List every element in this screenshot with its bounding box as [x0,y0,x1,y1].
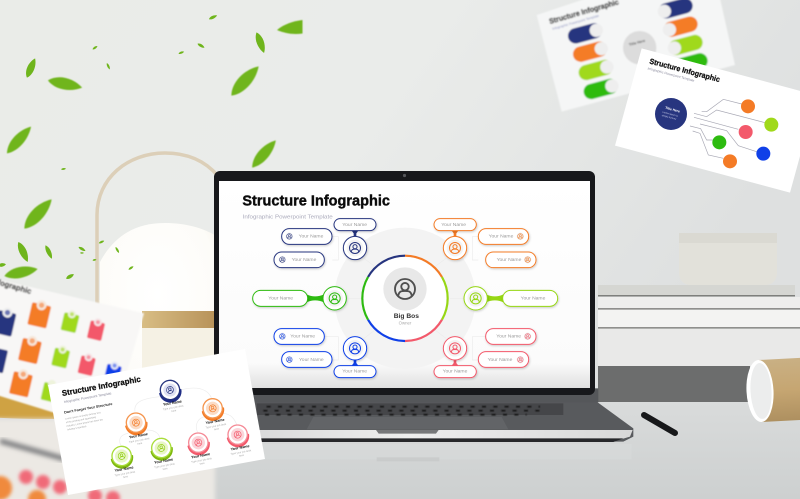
slide title: Structure Infographic [61,375,142,398]
front slide top right (network): Lorem ipsum is [662,111,679,118]
cardboard tube [745,357,800,423]
chart node orange right [200,397,228,433]
laptop [183,171,633,461]
chart node pink one: here [199,462,206,466]
network lines [690,99,765,158]
blue branch [274,329,376,378]
blue branch: Your Name [299,357,324,363]
connecting lines [120,388,237,447]
pen [644,415,675,433]
camera [403,174,406,177]
chart node orange left: here [137,442,143,446]
front slide top right (network): simply dummy [661,115,677,121]
chart node pink two [225,423,253,459]
title here circle [655,98,687,130]
chart node pink two: Your Name [230,444,250,451]
front slide left (org chart): Lorem Ipsum is simply dummy text [65,411,101,421]
subtitle: Infographic Powerpoint Template [243,214,333,220]
lime branch [464,287,558,310]
centre person [383,267,427,325]
chart node pink two: here [239,454,245,458]
pink branch: Your Name [488,357,513,363]
chart node pink two: Type your job desk [230,449,252,456]
back slide left (cards) [0,266,144,430]
chart node lime one: here [123,475,129,479]
orange branch: Your Name [441,222,466,228]
title: Structure Infographic [242,194,390,210]
centre ring [362,256,448,341]
chart node orange left: Type your job desk [129,437,151,444]
pink branch: Your Name [443,369,468,375]
blurred foreground object bottom left [0,419,215,499]
navy branch: Your Name [292,257,317,263]
front slide left (org chart): of the printing and typesetting [66,416,97,424]
chart node pink one: Your Name [191,452,210,459]
owner label: Owner [399,320,412,325]
chart node lime one: Your Name [114,465,134,473]
navy branch: Your Name [342,222,367,228]
coloured nodes [741,99,755,113]
chart node orange right: Your Name [205,418,225,425]
front slide top right (network): Infographic Powerpoint Template [647,66,695,83]
front slide left (org chart): industry. Lorem Ipsum has been the [66,418,104,428]
chart node lime one: Type your job desk [114,470,136,477]
chart node lime two: Type your job desk [154,462,176,469]
green branch [253,287,346,310]
orange branch: Your Name [497,257,522,263]
desk surface [0,402,800,499]
shelf stack with bowl [598,233,800,402]
back slide top right (pills) [537,0,735,112]
navy branch: Your Name [299,234,324,240]
chart node pink one: Type your job desk [191,457,213,464]
laptop screen [219,181,590,388]
chart node navy: Your Name [163,399,182,407]
chart node lime two: Your Name [154,457,173,465]
connector lines [325,237,486,360]
green branch: Your Name [268,295,293,301]
chart node orange left: Your Name [129,432,148,439]
back slide top right (pills): Infographic Powerpoint Template [552,14,600,31]
big boss name: Big Bos [394,313,419,320]
chart node navy: here [171,409,177,413]
navy branch [274,219,376,268]
laptop lid bezel [214,171,595,395]
chart node lime two [148,436,177,473]
chart node lime one [109,444,137,481]
front slide top right (network): Title Here [665,106,681,114]
falling leaves [0,14,303,281]
chart node navy: Type your job desk [163,404,185,411]
chart node navy [157,378,185,415]
back slide top right (pills): Title Here [629,39,646,47]
lime branch: Your Name [521,295,546,301]
background circle [334,228,476,369]
chart node orange left [123,411,151,447]
orange branch: Your Name [489,234,514,240]
laptop base with keyboard [183,388,633,461]
chart node orange right: Type your job desk [205,423,227,430]
slide side text: Don't Forget Your Structure [64,402,113,415]
pink branch: Your Name [496,334,521,340]
slide title: Structure Infographic [648,57,722,84]
chart node pink one [185,431,214,467]
chart node lime two: here [162,467,169,471]
pink branch [434,329,536,378]
blue branch: Your Name [342,369,367,375]
front slide left (org chart): industry's standard [67,425,87,431]
main infographic on screen [242,194,558,378]
lamp [0,153,218,419]
orange branch [434,219,536,268]
front slide left (org chart): Infographic Powerpoint Template [63,391,112,404]
chart node orange right: here [214,427,220,431]
front slide left (org chart) [48,349,265,495]
blue branch: Your Name [290,334,315,340]
front slide top right (network) [615,48,800,193]
